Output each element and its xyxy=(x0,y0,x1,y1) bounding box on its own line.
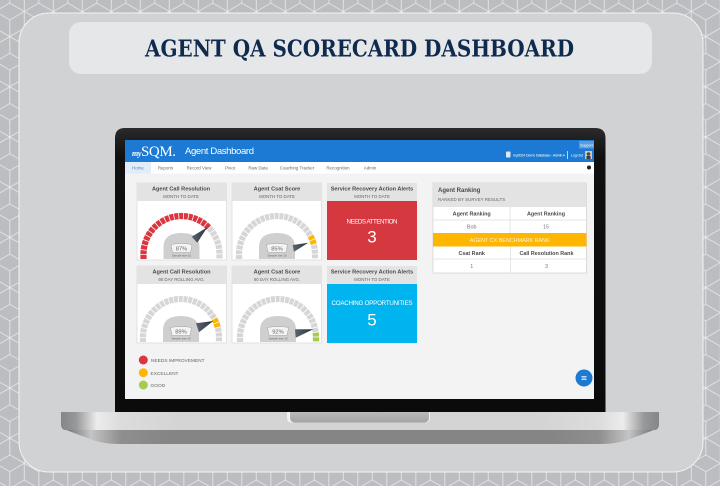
log out: Log Out xyxy=(571,154,583,158)
gauge card: csat 90 day xyxy=(232,266,322,343)
legend xyxy=(139,356,205,390)
laptop xyxy=(61,128,659,444)
gauge xyxy=(240,299,316,342)
alert card: coaching opportunities: Service Recovery Action Alerts xyxy=(331,270,413,276)
alert card: needs attention: 3 xyxy=(367,228,377,246)
navigation bar: Pivot xyxy=(225,166,236,170)
legend: NEEDS IMPROVEMENT xyxy=(151,358,205,364)
navigation bar: Home xyxy=(132,166,144,170)
screen xyxy=(125,140,594,399)
gauge card: csat 90 day: Agent Csat Score xyxy=(254,270,300,276)
alert card: needs attention: NEEDS ATTENTION xyxy=(346,218,398,226)
gauge card: call resolution month to date: Agent Call Resolution xyxy=(152,187,211,193)
agent ranking table: AGENT CX BENCHMARK RANK xyxy=(470,238,550,244)
agent ranking table: Agent Ranking xyxy=(438,188,481,194)
gauge: 87% xyxy=(176,246,187,252)
support button: Support xyxy=(580,144,593,148)
agent ranking table: 3 xyxy=(545,264,548,270)
agent ranking table: Call Resolution Rank xyxy=(520,251,573,257)
navigation bar: Reports xyxy=(158,166,174,170)
database selector: my2024 Demo Database - Admin ▾ xyxy=(513,154,565,158)
gauge card: csat month to date xyxy=(232,183,322,260)
logo: mySQM. xyxy=(132,144,176,160)
navigation bar: Coaching Tracker xyxy=(280,166,315,170)
alert card: coaching opportunities: MONTH TO DATE xyxy=(354,277,390,282)
navigation bar: Admin xyxy=(364,166,377,170)
dashboard header xyxy=(125,140,594,162)
agent ranking table xyxy=(433,183,586,273)
navigation bar xyxy=(125,162,594,174)
laptop bezel xyxy=(115,128,606,412)
gauge card: call resolution month to date: MONTH TO DATE xyxy=(163,194,199,199)
gauge card: call resolution month to date xyxy=(137,183,226,260)
floating menu button xyxy=(576,370,592,386)
gauge: Sample size 10 xyxy=(268,337,288,341)
gauge xyxy=(144,216,220,259)
alert card: needs attention: Service Recovery Action Alerts xyxy=(331,187,413,193)
dashboard name: Agent Dashboard xyxy=(185,146,254,157)
agent ranking table: RANKED BY SURVEY RESULTS xyxy=(438,197,505,202)
agent ranking table: Agent Ranking xyxy=(453,211,491,217)
legend: GOOD xyxy=(150,383,166,389)
laptop base xyxy=(61,412,659,444)
title banner xyxy=(69,22,652,74)
alert card: needs attention xyxy=(327,183,417,260)
gauge card: csat 90 day: 90 DAY ROLLING AVG. xyxy=(254,277,300,282)
alert card: needs attention: MONTH TO DATE xyxy=(354,194,390,199)
gauge: 89% xyxy=(175,330,187,336)
gauge: Sample size 10 xyxy=(267,254,287,258)
gauge: Sample size 10 xyxy=(172,254,192,258)
gauge card: call resolution 90 day xyxy=(137,266,226,343)
alert card: coaching opportunities: COACHING OPPORTUNITIES xyxy=(332,300,412,307)
alert card: coaching opportunities: 5 xyxy=(367,310,377,330)
agent ranking table: Bob xyxy=(467,224,476,230)
legend: EXCELLENT xyxy=(150,371,179,377)
help icon xyxy=(587,166,591,170)
gauge card: csat month to date: Agent Csat Score xyxy=(254,187,300,193)
agent ranking table: 15 xyxy=(543,224,549,230)
gauge xyxy=(143,299,219,342)
agent ranking table: 1 xyxy=(470,264,473,270)
gauge card: call resolution 90 day: 90 DAY ROLLING AVG. xyxy=(158,277,205,282)
navigation bar: Recognition xyxy=(326,166,350,170)
agent ranking table: Csat Rank xyxy=(459,251,485,257)
gauge: Sample size 10 xyxy=(171,337,191,341)
alert card: coaching opportunities xyxy=(327,266,417,343)
database selector xyxy=(506,152,565,158)
agent ranking table: Agent Ranking xyxy=(527,211,565,217)
gauge: 85% xyxy=(271,246,283,252)
gauge xyxy=(239,216,315,259)
gauge card: csat month to date: MONTH TO DATE xyxy=(259,194,295,199)
navigation bar: Raw Data xyxy=(248,166,268,170)
support button xyxy=(579,141,594,148)
gauge: 92% xyxy=(272,330,284,336)
navigation bar: Record View xyxy=(187,166,212,170)
avatar xyxy=(585,151,592,159)
gauge card: call resolution 90 day: Agent Call Resolution xyxy=(152,270,211,276)
title: AGENT QA SCORECARD DASHBOARD xyxy=(144,36,574,62)
